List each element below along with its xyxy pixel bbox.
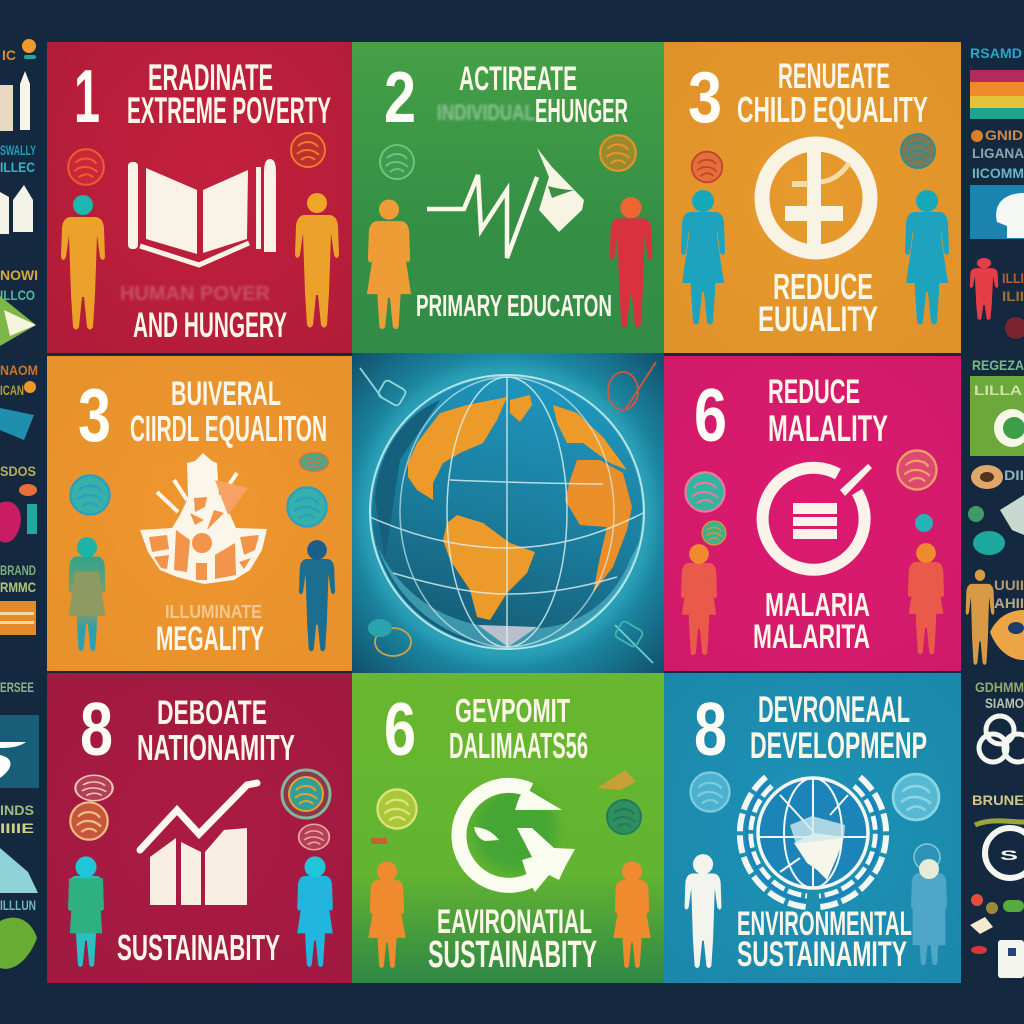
icon: world emblem with laurel [740,777,886,907]
heading line 2 goal 1: EXTREME POVERTY [127,90,331,131]
right sidebar: IICOMM [972,165,1024,181]
heading goal 1: ERADINATE [148,57,273,98]
person right [905,190,949,324]
person left [681,190,725,324]
icon: doodle top right [597,770,636,790]
grid lines [370,375,644,649]
left sidebar: INDS [0,802,34,818]
caption goal 3: REDUCE [773,266,873,307]
icon: doodle right [287,487,327,527]
left sidebar: IC [2,47,16,63]
icon: doodle left [692,152,722,182]
left sidebar: ICAN [0,382,24,398]
heading line 2 goal 4: CIIRDL EQUALITON [130,408,327,449]
icon: globe [370,375,644,649]
icon: doodle left lower [70,802,108,840]
heading goal 4: BUIVERAL [171,375,281,413]
icon: doodle right [607,800,641,834]
heading goal 9: DEVRONEAAL [758,689,910,730]
person right [297,856,333,967]
person right [610,197,652,327]
goal number 3: 3 [688,58,722,138]
heading goal 2: ACTIREATE [459,60,577,98]
icon: doodle left [690,772,730,812]
goal number 1: 1 [74,54,100,138]
icon: doodle small right [915,514,933,532]
icon: doodle top right [897,450,937,490]
icon: lotus [140,453,267,584]
icon: rising bar chart [140,783,257,905]
faded text: HUMAN POVER [120,283,271,305]
caption line 2 goal 9: SUSTAINAMITY [737,935,907,974]
heading line 2 goal 8: DALIMAATS56 [449,725,588,766]
icon: doodle top [300,453,328,471]
goal number 6: 6 [384,687,416,771]
caption goal 2: PRIMARY EDUCATON [416,288,612,323]
left sidebar: SWALLY [0,142,36,158]
icon: circle with bars and check [763,464,872,570]
doodles around the globe [360,362,656,663]
person right [908,543,944,654]
panel: goal 3 child equality [664,42,961,353]
person right [295,193,339,328]
panel: goal 3 universal equality [47,356,352,671]
left sidebar: ERSEE [0,679,34,695]
icon: doodle left [377,789,417,829]
person right [911,873,947,965]
left sidebar: BRAND [0,562,36,578]
icon: doodle right lower [914,844,940,879]
right sidebar: BRUNE [972,792,1024,808]
right sidebar: UUII [994,577,1024,593]
panel: goal 6 environmental sustainability [352,673,664,983]
caption line 2 goal 6: MALARITA [753,618,870,656]
right sidebar: S [1000,847,1018,863]
left sidebar: NOWI [0,267,38,283]
right sidebar: ILII [1002,288,1024,304]
icon: open book [128,159,276,265]
left sidebar: IIIIE [0,820,34,836]
continents [408,395,632,620]
person left [61,195,105,330]
caption goal 9: ENVIRONMENTAL [737,905,912,943]
icon: doodle top left [685,472,725,512]
icon: doodle right lower [299,824,329,850]
person left [69,537,105,651]
panel: goal 2 primary education [352,42,664,353]
icon: doodle right upper [282,770,330,818]
icon: knot [979,716,1024,762]
caption goal 6: MALARIA [765,586,870,623]
left sidebar: ILLEC [0,159,35,175]
right sidebar: LILLA [974,382,1022,398]
icon: doodle right [901,134,935,168]
person right [299,540,335,651]
person left [367,200,411,329]
left sidebar: RMMC [0,579,36,595]
caption goal 4: MEGALITY [156,620,264,658]
goal number 8: 8 [694,687,727,771]
left sidebar [0,39,39,969]
right sidebar: DII [1004,467,1024,483]
icon: doodle left upper [75,775,113,801]
left sidebar: NAOM [0,362,38,378]
panel: goal 8 environmental development [664,673,961,983]
person left [681,544,717,655]
icon: small red mark [371,838,387,844]
icon: doodle right upper [893,774,939,820]
heading goal 8: GEVPOMIT [455,692,570,729]
faded text goal 4: ILLUMINATE [165,602,262,622]
left sidebar: ILLCO [0,287,35,303]
heading line 2 goal 6: MALALITY [768,408,888,449]
right sidebar: AHII [994,595,1024,611]
panel: goal 6 reduce mortality [664,356,961,671]
panel: goal 1 eradicate extreme poverty [47,42,352,353]
heading goal 7: DEBOATE [157,694,267,732]
heading goal 6: REDUCE [768,373,860,411]
goal number 2: 2 [384,58,416,138]
heading line 2 goal 2: EHUNGER [535,92,628,129]
caption goal 8: EAVIRONATIAL [437,903,592,941]
right sidebar: GNID [985,127,1023,143]
right sidebar: RSAMD [970,45,1022,61]
goal number 8: 8 [80,687,113,771]
right sidebar [966,45,1024,978]
icon: doodle left [70,475,110,515]
panel: globe [352,353,664,673]
icon: doodle right [600,135,636,171]
heading goal 3: RENUEATE [778,57,890,96]
icon: recycling arrows [459,785,575,892]
goal number 6: 6 [694,373,727,457]
icon: circle with cross [762,144,870,252]
faded text goal 2: INDIVIDUAL [437,100,535,125]
person right [613,861,651,968]
caption goal 1: AND HUNGERY [133,306,287,345]
icon: doodle left [380,145,414,179]
left sidebar: ILLLUN [0,897,36,913]
caption line 2 goal 8: SUSTAINABITY [428,934,597,976]
person left [68,856,104,967]
icon: doodle small left [702,521,726,545]
icon: doodle right [291,133,325,167]
caption goal 7: SUSTAINABITY [117,927,280,968]
icon: doodle left [68,149,104,185]
caption line 2 goal 3: EUUALITY [758,300,878,339]
goal number 3: 3 [78,373,111,457]
person left [685,854,721,968]
heading line 2 goal 7: NATIONAMITY [137,727,295,768]
icon: pulse and leaf [427,148,584,258]
person left [368,861,406,968]
panel: goal 8 debate nationality [47,673,352,983]
left sidebar: SDOS [0,463,36,479]
